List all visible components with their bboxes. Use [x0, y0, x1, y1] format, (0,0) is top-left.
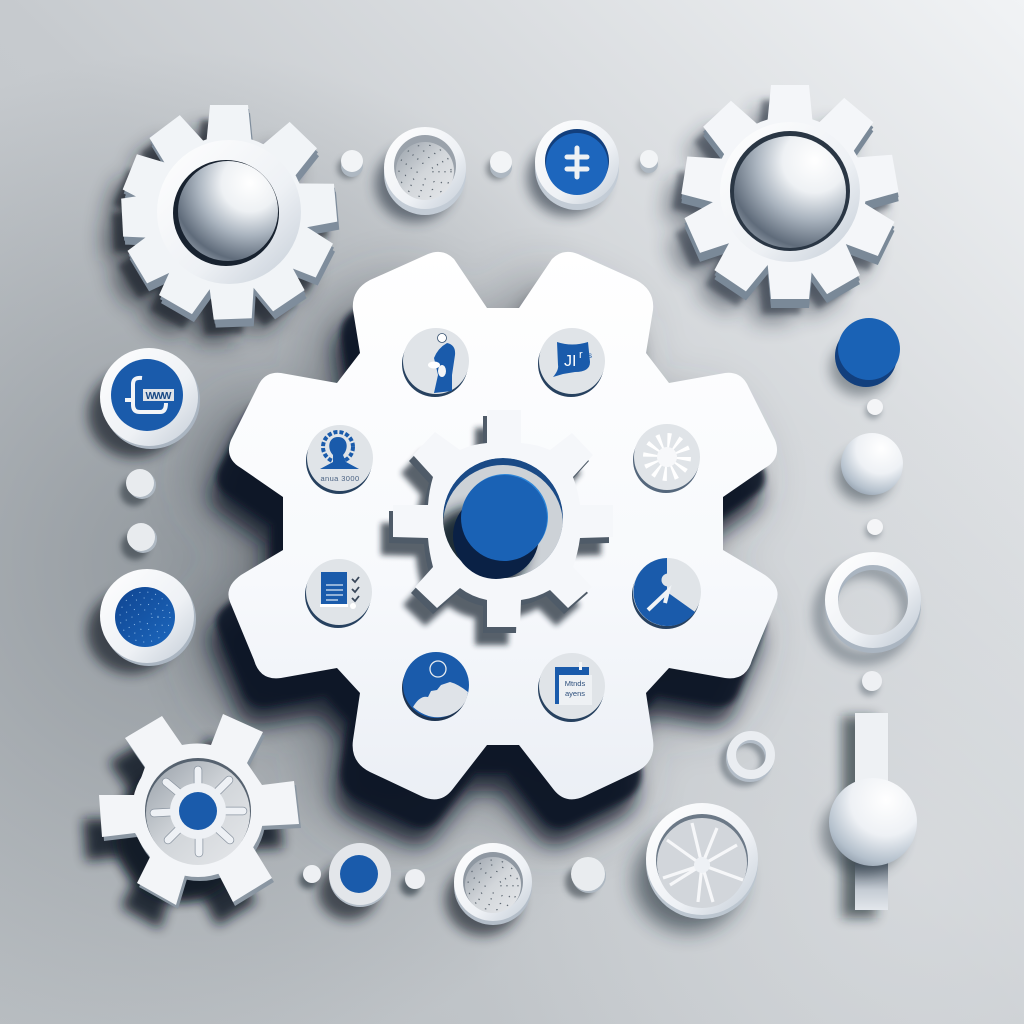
icon: cloud landscape	[402, 652, 469, 721]
central gear with blue button	[381, 410, 613, 645]
gear: top left	[103, 105, 340, 344]
dots: left column	[120, 469, 157, 560]
ring: small lower right	[724, 736, 770, 782]
button: left blue dotted	[87, 569, 196, 674]
icon: shield with letters: r	[579, 349, 583, 361]
gear: bottom left with sun icon	[83, 714, 301, 929]
ring: top dotted	[375, 127, 466, 222]
icon: calendar note	[538, 653, 605, 722]
icon: shield with letters: JI	[564, 353, 576, 370]
dot: right upper	[865, 399, 883, 419]
dot: bottom small	[400, 869, 425, 896]
dot: bottom right of ring	[565, 857, 606, 898]
dot: bottom far left	[299, 865, 321, 889]
icon: document checklist	[305, 559, 372, 628]
icon: starburst	[633, 424, 700, 493]
sphere: right	[836, 433, 903, 502]
icon: calendar note: Mtnds	[565, 679, 585, 688]
button: top blue with cross glyph	[527, 120, 619, 216]
icon: person	[402, 328, 469, 397]
gear: top right	[663, 85, 899, 323]
dots: top row	[337, 150, 658, 180]
dot: right middle	[865, 519, 883, 539]
dot: right lower	[859, 671, 882, 696]
icon: shield with letters: s	[588, 351, 592, 360]
large central gear plate	[198, 252, 778, 845]
icon: head with gear halo: anua 3000	[320, 474, 360, 483]
disc: right blue	[830, 318, 900, 396]
button: left blue with WWW card	[88, 348, 200, 458]
button: left blue with WWW card: WWW	[146, 391, 172, 402]
button: bottom blue	[318, 843, 391, 920]
blue button	[453, 474, 548, 579]
wheel with spokes	[634, 803, 758, 932]
gear hole	[443, 458, 563, 578]
knob lever	[821, 713, 917, 918]
icon: calendar note: ayens	[565, 689, 585, 698]
icon: head with gear halo	[306, 425, 373, 494]
icon: shield with letters	[538, 328, 605, 397]
ring: right open	[820, 558, 914, 658]
ring: bottom dotted	[445, 843, 532, 936]
icon: pie chart with figure	[632, 558, 701, 629]
